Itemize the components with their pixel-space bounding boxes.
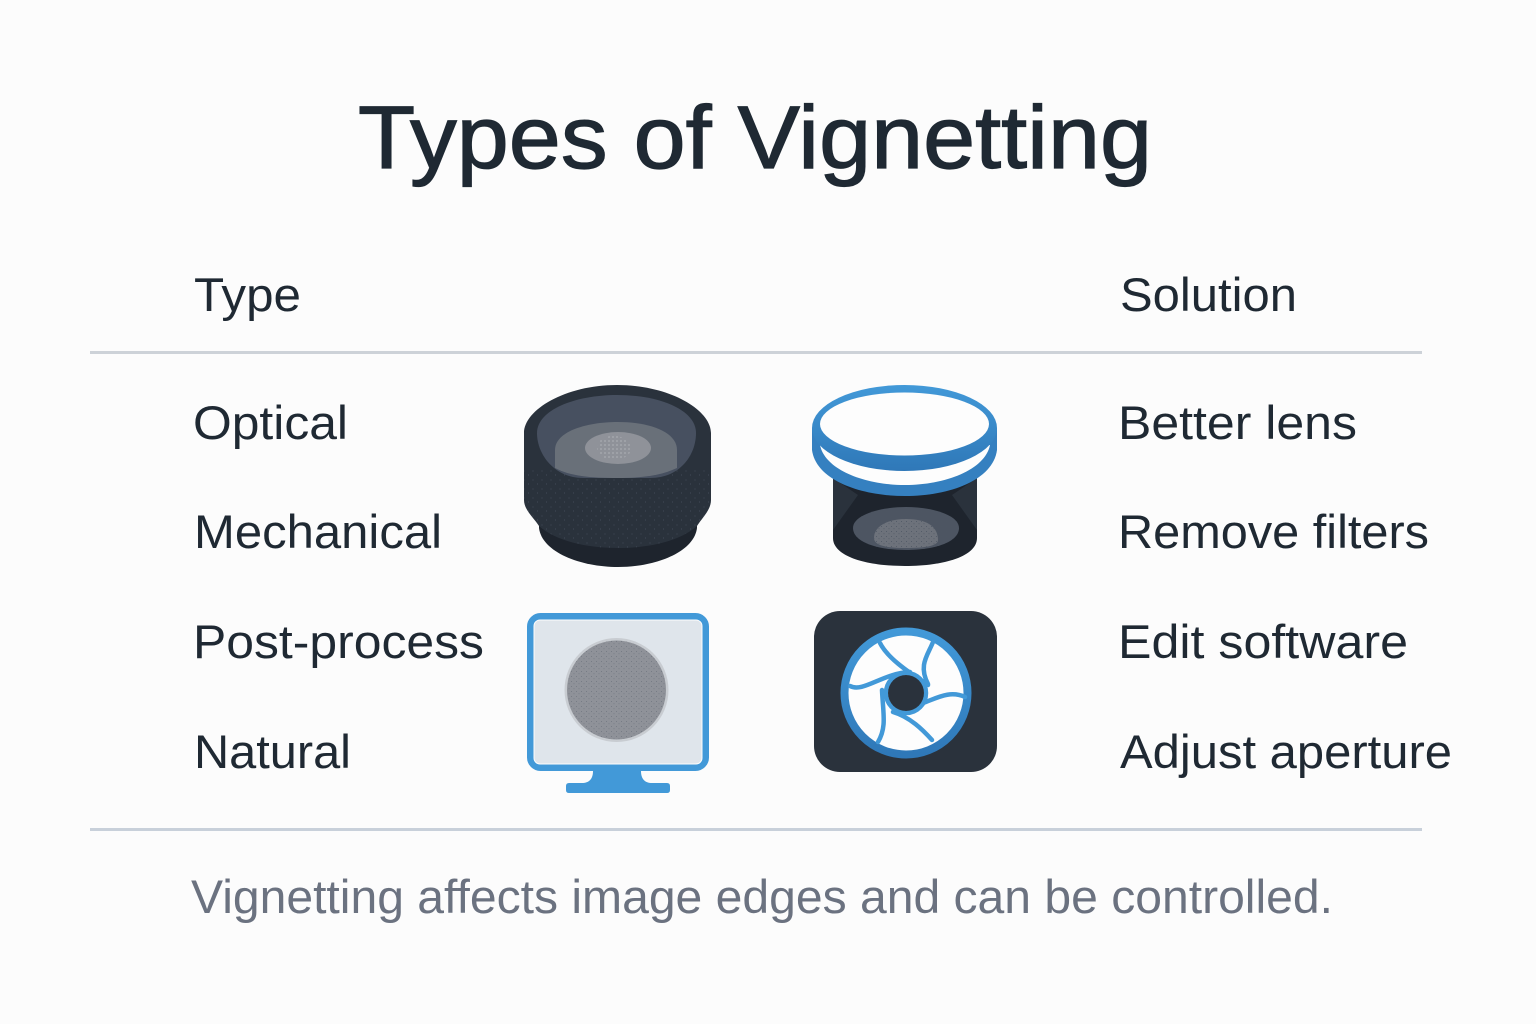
icon: lens with blue filter ring [812, 385, 997, 566]
type: Post-process: Post-process [193, 615, 484, 668]
icon: dark lens [524, 385, 711, 567]
type: Natural: Natural [194, 725, 351, 778]
column heading: Type: Type [194, 268, 301, 321]
solution: Remove filters: Remove filters [1118, 505, 1429, 558]
solution: Adjust aperture: Adjust aperture [1120, 725, 1452, 778]
solution: Better lens: Better lens [1118, 396, 1357, 449]
icon: aperture [814, 611, 997, 772]
title: Types of Vignetting [358, 87, 1152, 187]
type: Mechanical: Mechanical [194, 505, 442, 558]
column heading: Solution: Solution [1120, 268, 1297, 321]
icon: monitor with dark centre [530, 616, 706, 793]
footer note: Vignetting affects image edges and can be controlled. [191, 870, 1333, 923]
type labels [193, 396, 484, 778]
type: Optical: Optical [193, 396, 348, 449]
solution labels [1118, 396, 1452, 778]
solution: Edit software: Edit software [1118, 615, 1408, 668]
